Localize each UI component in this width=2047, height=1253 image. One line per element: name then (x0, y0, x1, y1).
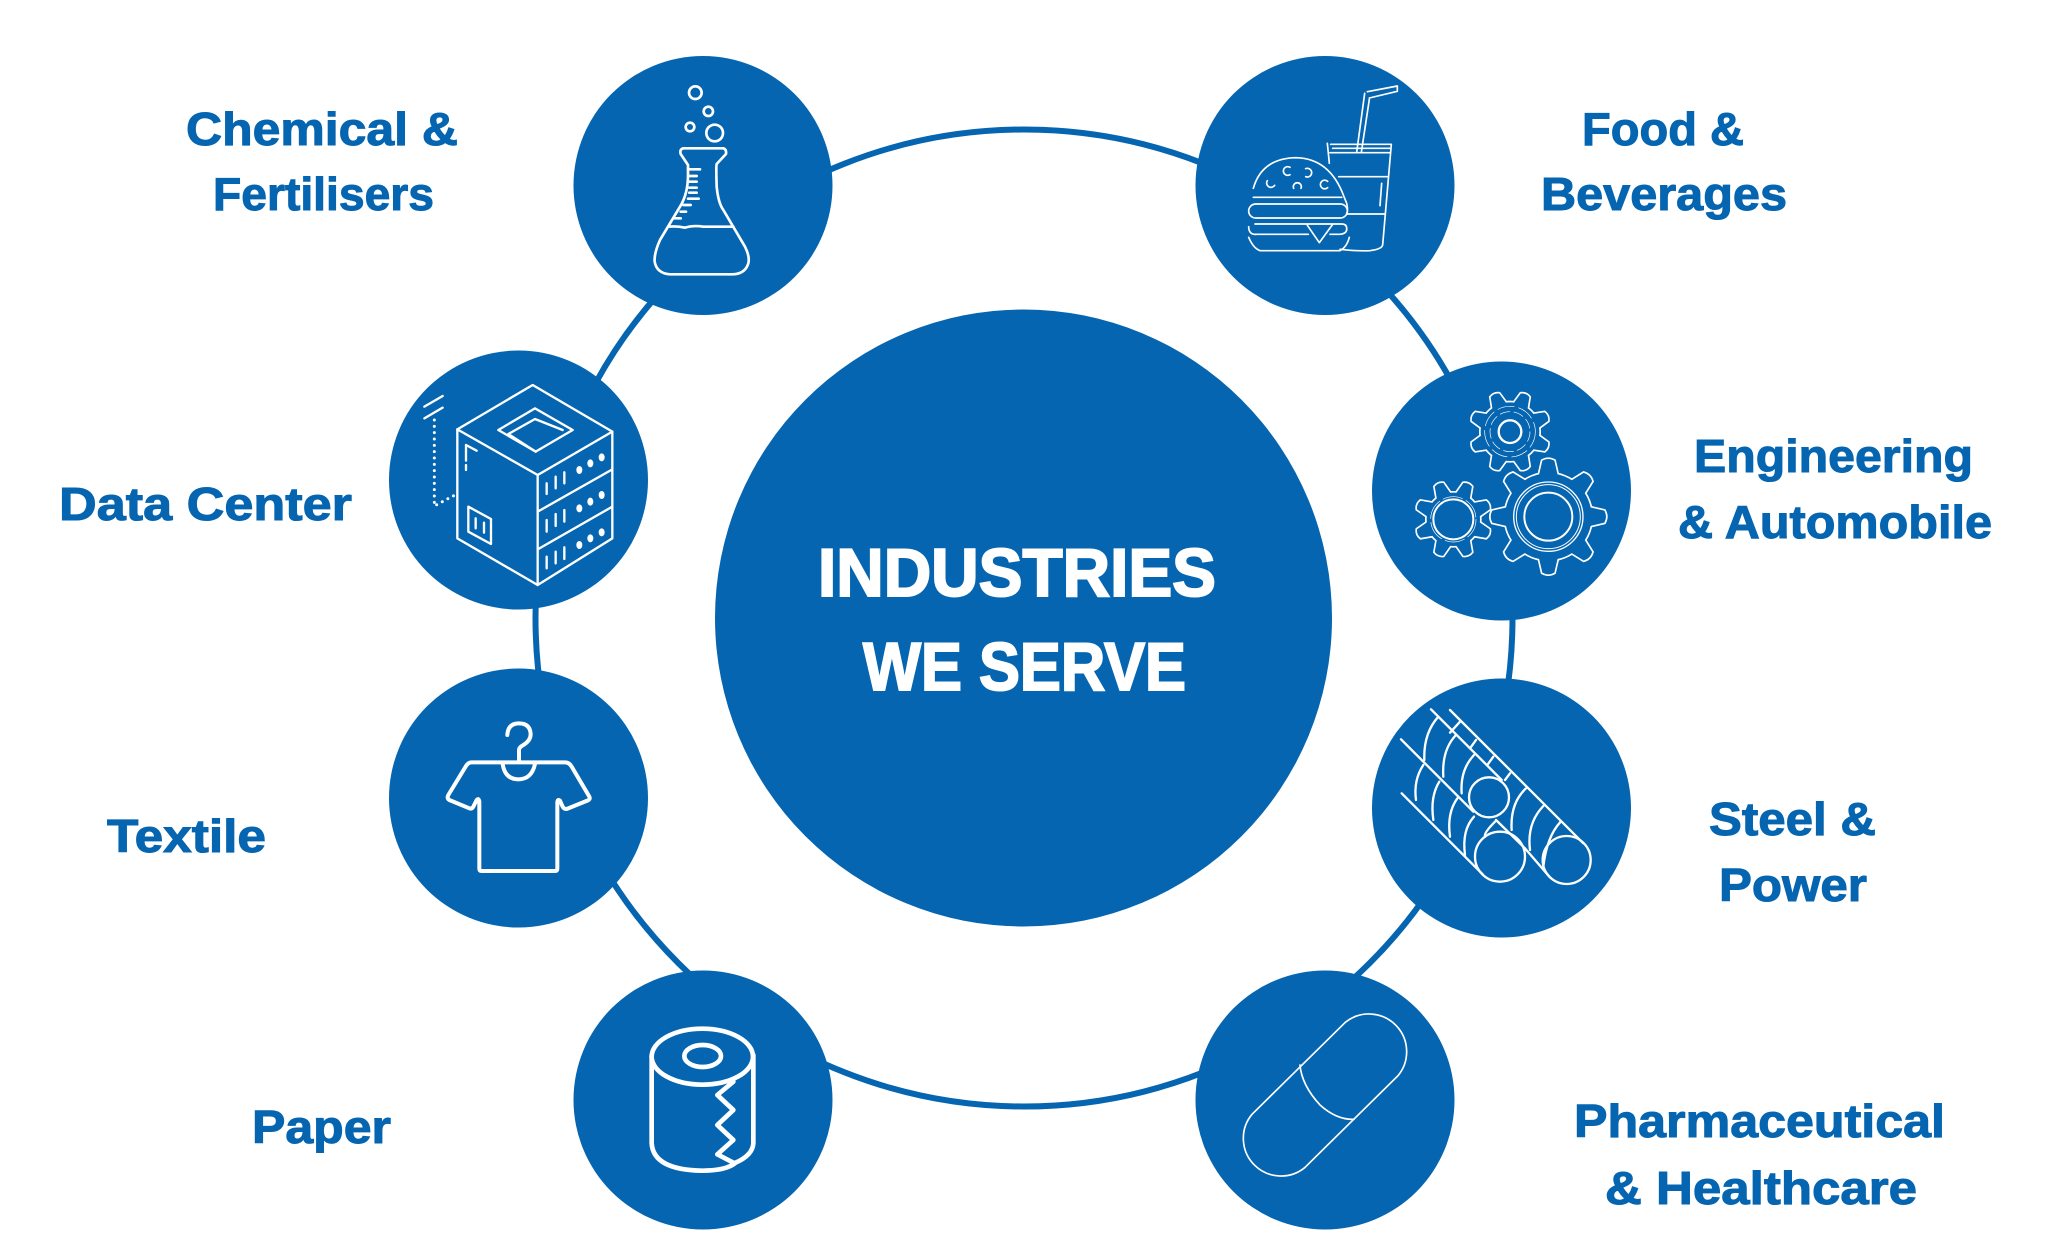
label: engineering and automobile (1678, 430, 1992, 548)
title (818, 535, 1216, 705)
node: data center (389, 350, 648, 610)
node: pharmaceutical and healthcare (1196, 970, 1454, 1230)
icon: burger and drink (1249, 86, 1397, 251)
label: textile: Textile (107, 810, 266, 862)
label: food and beverages: Beverages (1541, 168, 1787, 220)
label: food and beverages (1541, 103, 1787, 220)
label: chemical and fertilisers: Fertilisers (213, 168, 434, 220)
label: chemical and fertilisers: Chemical & (186, 103, 458, 155)
label: pharmaceutical and healthcare: Pharmaceutical (1574, 1095, 1945, 1147)
title: WE SERVE (863, 629, 1186, 705)
node: chemical and fertilisers (574, 56, 832, 315)
icon: gears (1415, 391, 1606, 574)
icon: steel bars (1401, 709, 1591, 884)
label: chemical and fertilisers (186, 103, 458, 220)
label: pharmaceutical and healthcare (1574, 1095, 1945, 1214)
connecting ring (536, 130, 1512, 1106)
icon: t-shirt on hanger (448, 723, 590, 871)
label: food and beverages: Food & (1582, 103, 1744, 155)
label: steel and power (1709, 793, 1876, 911)
label: engineering and automobile: & Automobile (1678, 496, 1992, 548)
node: paper (574, 970, 832, 1230)
label: paper: Paper (252, 1101, 391, 1153)
label: steel and power: Power (1719, 859, 1867, 911)
node: steel and power (1372, 678, 1631, 938)
icon: capsule (1243, 1014, 1407, 1176)
label: data center: Data Center (59, 478, 352, 530)
center circle with title (715, 310, 1332, 926)
icon: flask (655, 86, 749, 274)
node: textile (389, 668, 648, 928)
label: pharmaceutical and healthcare: & Healthcare (1605, 1162, 1917, 1214)
label: steel and power: Steel & (1709, 793, 1876, 845)
node: food and beverages (1196, 56, 1454, 315)
icon: server cube (424, 385, 612, 585)
node: engineering and automobile (1372, 362, 1631, 620)
label: engineering and automobile: Engineering (1694, 430, 1973, 482)
icon: paper roll (652, 1029, 753, 1171)
title: INDUSTRIES (818, 535, 1216, 611)
